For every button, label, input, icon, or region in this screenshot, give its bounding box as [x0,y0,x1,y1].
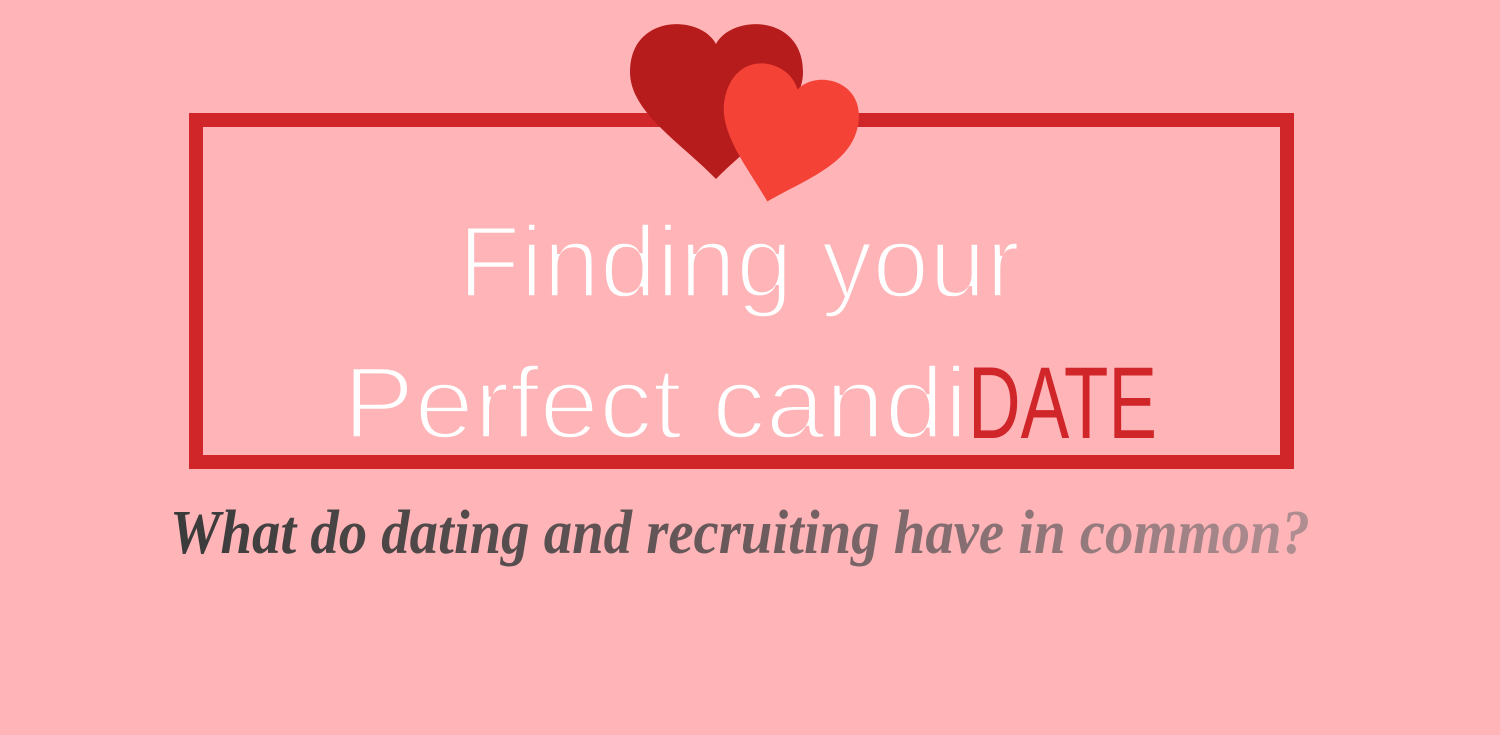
title frame [196,120,1287,462]
title [343,205,1157,460]
title: DATE [968,346,1157,460]
subtitle: What do dating and recruiting have in common? [170,499,1310,567]
title: Finding your [458,205,1020,319]
title: Perfect candi [343,346,968,460]
icon: overlapping hearts [630,24,868,219]
